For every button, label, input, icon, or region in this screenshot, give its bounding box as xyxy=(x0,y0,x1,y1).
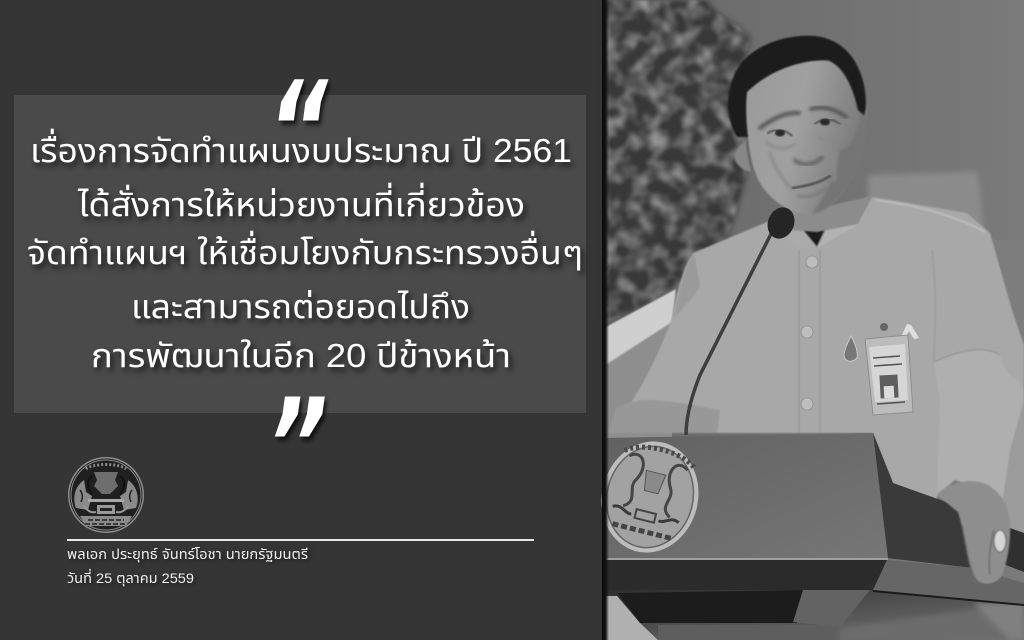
quote text xyxy=(27,128,583,374)
signature text xyxy=(67,546,308,587)
signature text: พลเอก ประยุทธ์ จันทร์โอชา นายกรัฐมนตรี xyxy=(67,546,308,563)
closing quotation mark: ” xyxy=(268,372,328,521)
seal on lectern xyxy=(590,431,710,563)
photo background wall xyxy=(604,0,1024,640)
quote text: เรื่องการจัดทำแผนงบประมาณ ปี 2561 xyxy=(30,128,572,169)
hand on lectern xyxy=(937,481,1010,584)
lectern front xyxy=(604,433,888,558)
face shading, eyes, nose and mouth xyxy=(760,108,866,214)
lectern xyxy=(604,433,1024,640)
jacket buttons xyxy=(801,256,818,410)
quote text: ได้สั่งการให้หน่วยงานที่เกี่ยวข้อง xyxy=(77,182,525,223)
photo: speaker at lectern xyxy=(590,0,1024,640)
jacket collar xyxy=(777,197,873,248)
quote text: จัดทำแผนฯ ให้เชื่อมโยงกับกระทรวงอื่นๆ xyxy=(27,230,583,271)
panel: dark background xyxy=(0,0,604,640)
quote text: การพัฒนาในอีก 20 ปีข้างหน้า xyxy=(91,337,511,374)
person: head xyxy=(728,36,873,232)
background light wedge xyxy=(604,289,676,366)
microphone xyxy=(686,203,799,435)
quote text: และสามารถต่อยอดไปถึง xyxy=(131,288,470,325)
opening quotation mark: “ xyxy=(268,54,329,208)
badge and pins xyxy=(844,323,919,415)
lectern side xyxy=(873,433,973,568)
divider line xyxy=(67,539,534,541)
hair xyxy=(728,36,866,137)
signature text: วันที่ 25 ตุลาคม 2559 xyxy=(67,568,194,587)
panel: quote box xyxy=(14,95,586,413)
icon: government seal xyxy=(68,457,144,533)
photo: tree foliage xyxy=(604,0,750,325)
person: jacket xyxy=(607,197,1024,510)
photo left edge shadow xyxy=(602,0,609,640)
lectern underside xyxy=(604,590,1024,640)
